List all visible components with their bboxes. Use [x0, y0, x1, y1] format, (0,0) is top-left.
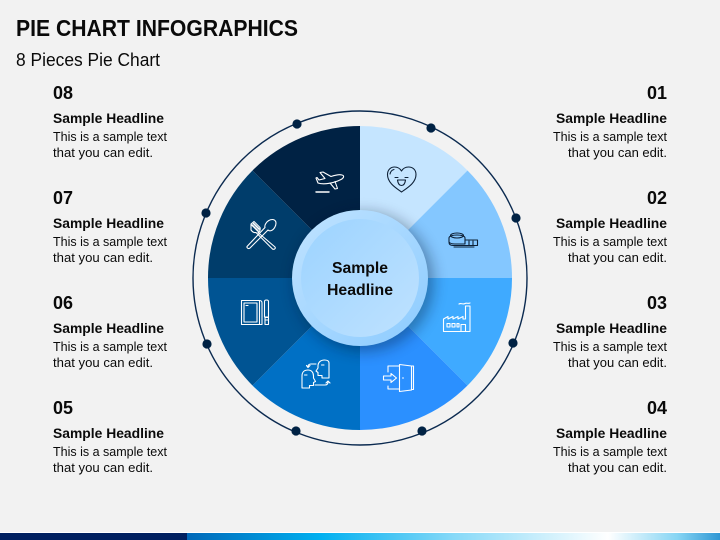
text block 03: This is a sample text: [553, 339, 667, 354]
center label: Headline: [327, 282, 393, 299]
slice 04: [360, 278, 468, 430]
subtitle: 8 Pieces Pie Chart: [16, 50, 160, 70]
outer ring with dots: [193, 111, 527, 445]
text block 05: Sample Headline: [53, 425, 164, 441]
text block 01: [553, 83, 667, 160]
icon: airplane: [316, 172, 344, 192]
text block 04: Sample Headline: [556, 425, 667, 441]
text block 02: that you can edit.: [568, 250, 667, 265]
text block 07: that you can edit.: [53, 250, 153, 265]
bottom gradient bar: [0, 532, 720, 540]
center label: Sample: [332, 260, 388, 277]
text block 05: that you can edit.: [53, 460, 153, 475]
text block 06: [53, 293, 167, 370]
icon: door with arrow: [384, 364, 414, 392]
text block 03: [553, 293, 667, 370]
text block 03: Sample Headline: [556, 320, 667, 336]
text block 06: This is a sample text: [53, 339, 167, 354]
text block 04: 04: [647, 398, 667, 418]
text block 01: Sample Headline: [556, 110, 667, 126]
icon: notebook and pen: [242, 300, 268, 324]
text block 07: [53, 188, 167, 265]
slice 05: [252, 278, 360, 430]
icon: heart: [388, 167, 416, 192]
text block 08: [53, 83, 167, 160]
text block 03: that you can edit.: [568, 355, 667, 370]
text block 05: [53, 398, 167, 475]
icon: measuring tape: [449, 233, 478, 247]
text block 04: [553, 398, 667, 475]
text block 08: Sample Headline: [53, 110, 164, 126]
hub shadow: [294, 212, 434, 352]
center hub: [292, 210, 428, 346]
text block 01: 01: [647, 83, 667, 103]
text block 04: that you can edit.: [568, 460, 667, 475]
icon: fork and spoon: [247, 220, 276, 249]
text block 06: 06: [53, 293, 73, 313]
icon: factory: [444, 303, 470, 332]
text block 02: Sample Headline: [556, 215, 667, 231]
text block 06: Sample Headline: [53, 320, 164, 336]
text block 08: This is a sample text: [53, 129, 167, 144]
text block 01: that you can edit.: [568, 145, 667, 160]
text block 02: This is a sample text: [553, 234, 667, 249]
slice 08: [252, 126, 360, 278]
text block 05: 05: [53, 398, 73, 418]
slice 06: [208, 278, 360, 386]
text block 04: This is a sample text: [553, 444, 667, 459]
text block 06: that you can edit.: [53, 355, 153, 370]
slice 02: [360, 170, 512, 278]
text block 03: 03: [647, 293, 667, 313]
icon: two heads exchanging ideas: [302, 360, 330, 388]
slice 01: [360, 126, 468, 278]
slice 03: [360, 278, 512, 386]
text block 05: This is a sample text: [53, 444, 167, 459]
text block 02: 02: [647, 188, 667, 208]
title: PIE CHART INFOGRAPHICS: [16, 15, 298, 41]
text block 01: This is a sample text: [553, 129, 667, 144]
text block 08: that you can edit.: [53, 145, 153, 160]
slice 07: [208, 170, 360, 278]
text block 08: 08: [53, 83, 73, 103]
text block 02: [553, 188, 667, 265]
pie chart: [208, 126, 512, 430]
text block 07: Sample Headline: [53, 215, 164, 231]
text block 07: This is a sample text: [53, 234, 167, 249]
text block 07: 07: [53, 188, 73, 208]
